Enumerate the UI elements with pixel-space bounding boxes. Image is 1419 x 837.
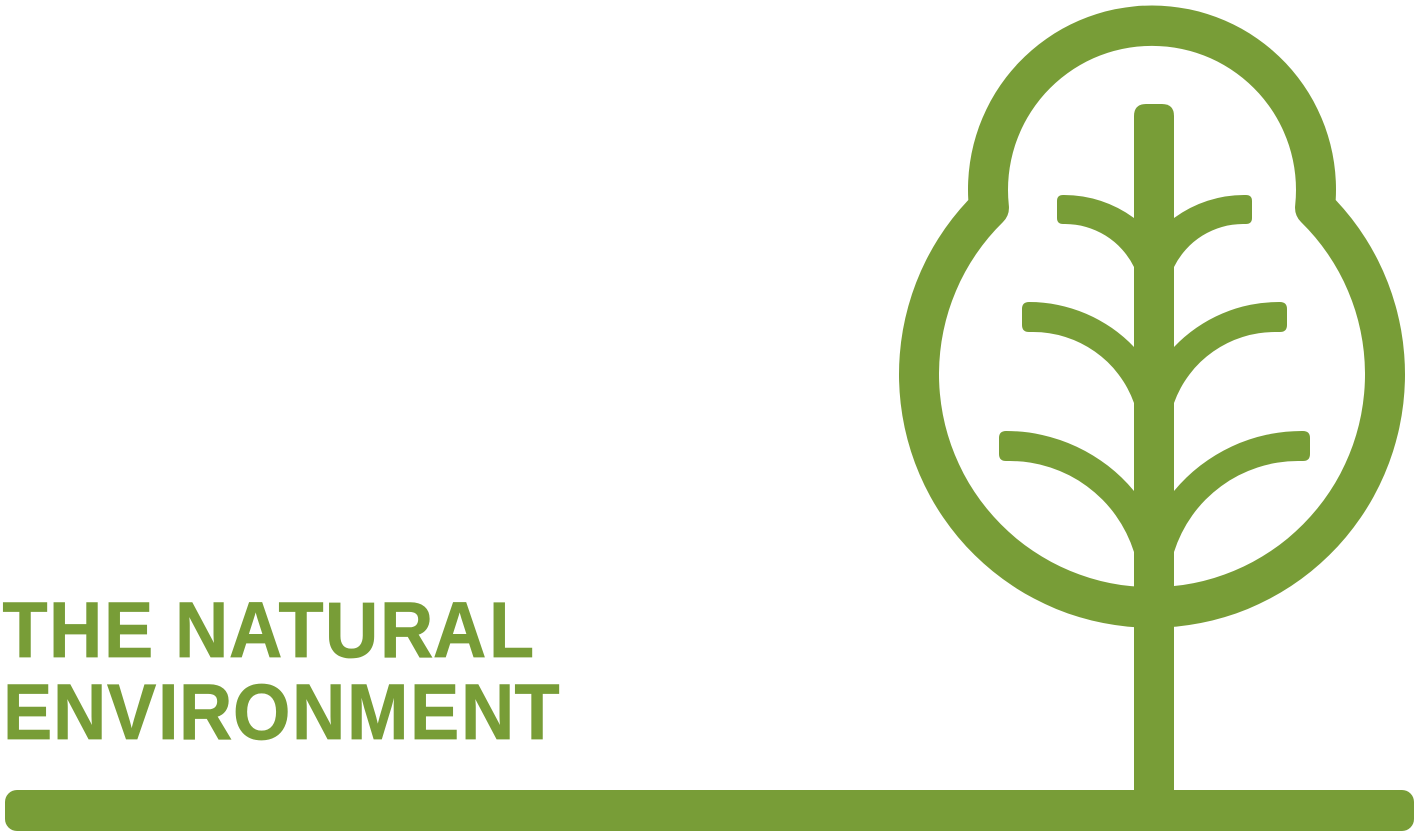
- upper left branch: [1057, 195, 1140, 267]
- ground line: [5, 790, 1414, 831]
- upper right branch: [1168, 195, 1252, 267]
- lower left branch: [999, 431, 1140, 552]
- title: The Natural Environment: ENVIRONMENT: [3, 669, 560, 757]
- lower right branch: [1168, 431, 1310, 552]
- title: The Natural Environment: THE NATURAL: [3, 587, 534, 675]
- middle left branch: [1022, 302, 1140, 403]
- tree crown outline: [899, 5, 1405, 628]
- tree trunk: [1134, 104, 1174, 800]
- title: The Natural Environment: [3, 587, 560, 757]
- middle right branch: [1168, 302, 1287, 403]
